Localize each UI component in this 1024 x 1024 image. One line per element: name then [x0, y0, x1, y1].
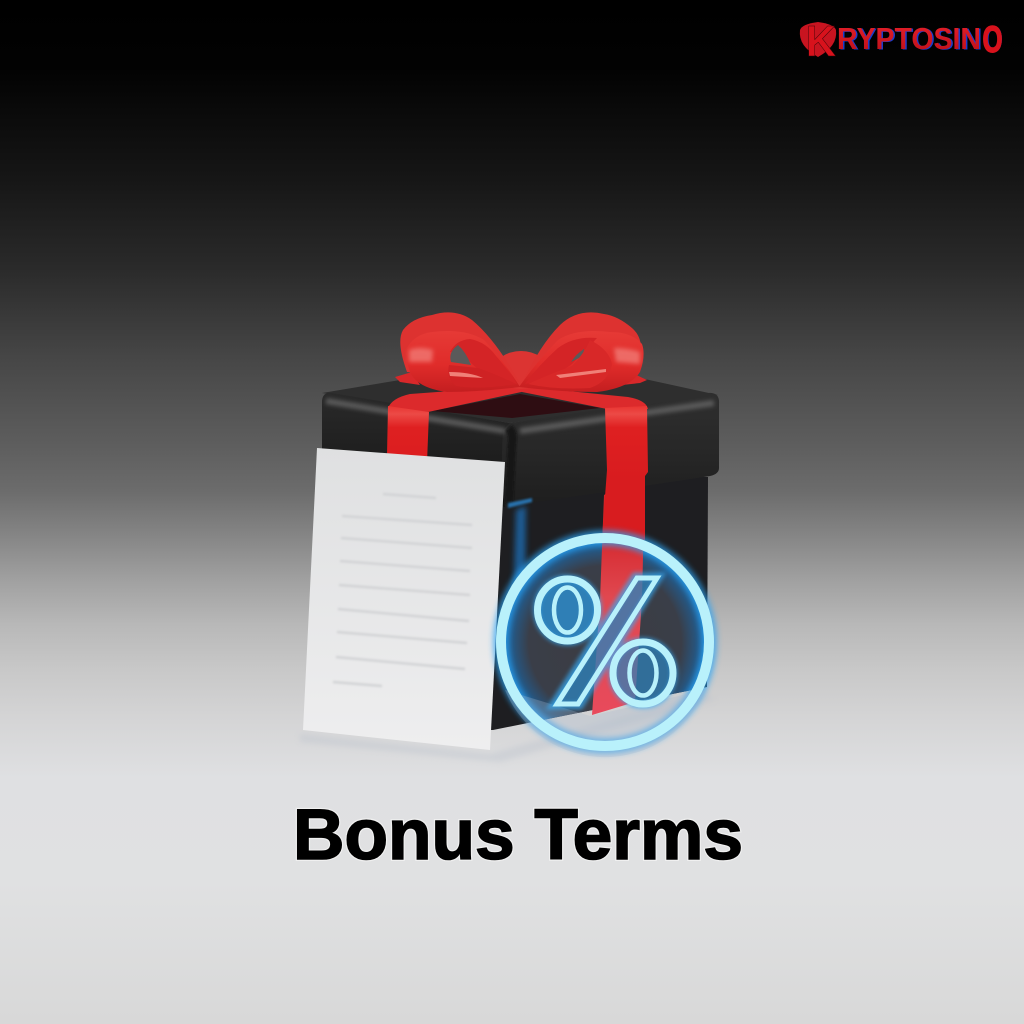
body blue reflection [512, 506, 526, 640]
terms document [303, 448, 505, 750]
lid bottom blue reflection [508, 498, 532, 508]
box body [345, 470, 708, 730]
left bow lower fold [448, 365, 516, 388]
lid ribbon left [387, 406, 429, 463]
logo wordmark: O [984, 19, 1003, 60]
percent glyph fills [534, 576, 676, 707]
title halo: Bonus Terms [293, 796, 743, 875]
right bow loop front [519, 331, 644, 392]
box body ribbon [592, 470, 645, 715]
lid top face [322, 378, 718, 423]
right bow lower fold [528, 340, 612, 388]
logo wordmark: RYPTOSIN [838, 22, 982, 56]
paper sheet [303, 448, 505, 750]
logo wordmark [806, 17, 1003, 66]
right bow hole [571, 349, 584, 362]
gift box [300, 312, 719, 762]
body tint inside ring [506, 543, 704, 720]
left bow loop back [400, 312, 519, 382]
neon percent badge [501, 538, 709, 757]
left bow inner surface [450, 339, 517, 384]
lid left face [322, 393, 510, 507]
right bow inner surface [525, 338, 597, 384]
lid ribbon right [602, 406, 648, 540]
right bow loop back [523, 312, 641, 382]
logo wordmark: O [982, 19, 1002, 60]
title [293, 796, 743, 875]
logo wordmark: RYPTOSIN [837, 21, 981, 56]
bow knot [494, 351, 548, 389]
left bow loop front [406, 331, 520, 392]
lid edge highlights [326, 401, 714, 431]
bow tails [395, 372, 647, 385]
blue glow behind ring [501, 538, 709, 746]
bow highlights [409, 348, 640, 364]
lid right face [502, 393, 719, 507]
ribbon band left on top [388, 386, 526, 412]
left bow hole [450, 345, 471, 365]
icon: logo shield [800, 22, 836, 57]
logo wordmark: K [806, 17, 836, 66]
ribbon band right on top [518, 386, 648, 409]
floor tint inside ring [505, 690, 705, 757]
percent glow [536, 576, 674, 706]
title text: Bonus Terms [293, 796, 743, 875]
dark top panel between ribbons [432, 394, 600, 418]
percent symbol [538, 578, 673, 704]
ring [501, 538, 709, 746]
red bow [395, 312, 647, 392]
logo: Kryptosino [800, 17, 1003, 66]
lid corner [509, 428, 513, 503]
soft shadow under box [300, 692, 715, 762]
paper text lines [333, 494, 472, 686]
